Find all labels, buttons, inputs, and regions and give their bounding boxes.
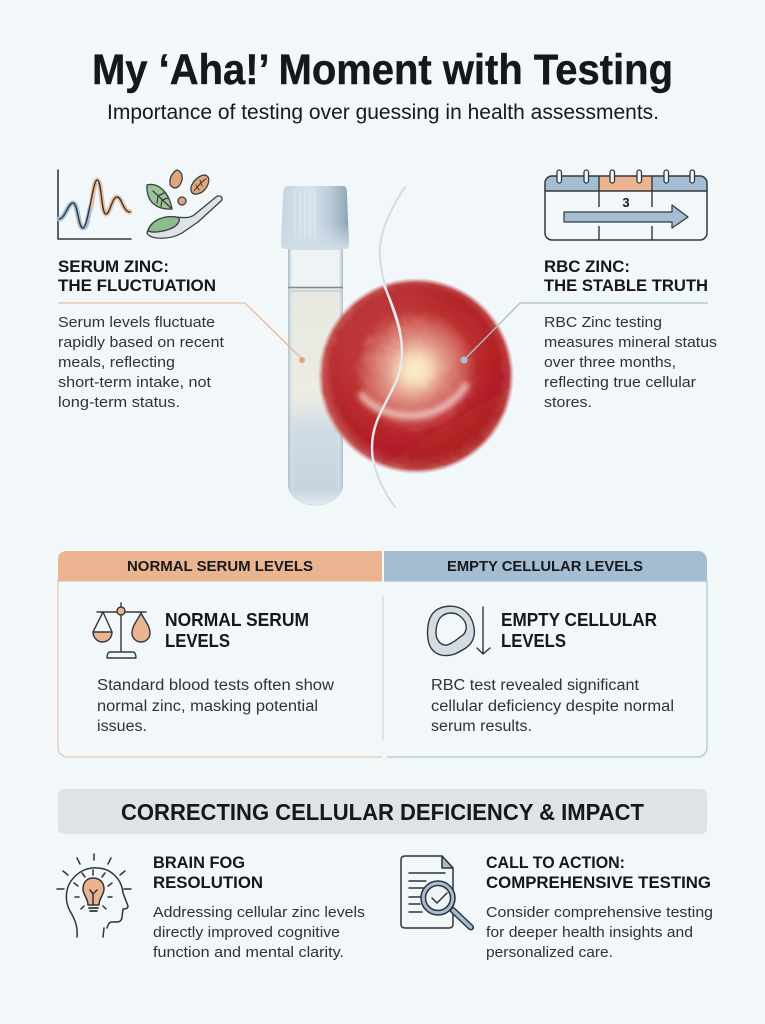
- icon: document with magnifier: [401, 856, 473, 930]
- header: normal serum levels: NORMAL SERUM LEVELS: [127, 559, 313, 575]
- panel: normal serum levels: [58, 551, 382, 757]
- text: brain fog description: Addressing cellular zinc levels: [153, 904, 365, 921]
- text: serum zinc description: short-term intake, not: [58, 374, 212, 391]
- heading: normal serum levels: NORMAL SERUM: [165, 610, 309, 630]
- heading: empty cellular levels: [501, 610, 657, 651]
- text: call to action description: Consider comprehensive testing: [486, 904, 713, 921]
- icon: fluctuation chart: [58, 170, 131, 239]
- text: normal serum description: issues.: [97, 718, 147, 735]
- text: empty cellular description: RBC test revealed significant: [431, 677, 640, 694]
- banner: correcting cellular deficiency: CORRECTING CELLULAR DEFICIENCY & IMPACT: [121, 799, 644, 825]
- heading: empty cellular levels: EMPTY CELLULAR: [501, 610, 657, 630]
- illustration: test tube: [281, 186, 349, 505]
- heading: brain fog resolution: [153, 854, 263, 892]
- text: rbc zinc description: over three months,: [544, 354, 676, 371]
- heading: call to action: COMPREHENSIVE TESTING: [486, 874, 711, 892]
- heading: serum zinc: THE FLUCTUATION: [58, 276, 216, 295]
- heading: rbc zinc: THE STABLE TRUTH: [544, 276, 708, 295]
- heading: normal serum levels: LEVELS: [165, 631, 230, 651]
- text: empty cellular description: [431, 677, 674, 735]
- icon: balance scale: [93, 603, 150, 658]
- illustration: red blood cell: [318, 278, 514, 474]
- header: normal serum levels: [58, 551, 382, 581]
- text: empty cellular description: cellular deficiency despite normal: [431, 698, 674, 715]
- callout: rbc leader line: [460, 303, 708, 364]
- heading: serum zinc: [58, 257, 216, 295]
- heading: rbc zinc: [544, 257, 708, 295]
- panel: rbc zinc: [544, 170, 717, 411]
- text: normal serum description: normal zinc, masking potential: [97, 698, 318, 715]
- text: rbc zinc description: stores.: [544, 394, 592, 411]
- text: rbc zinc description: [544, 314, 717, 411]
- subtitle: Importance of testing over guessing in health assessments.: [107, 101, 659, 124]
- text: brain fog description: directly improved cognitive: [153, 924, 340, 941]
- text: serum zinc description: meals, reflecting: [58, 354, 175, 371]
- text: brain fog description: function and mental clarity.: [153, 944, 344, 961]
- heading: call to action: CALL TO ACTION:: [486, 854, 625, 872]
- callout: serum leader line: [58, 303, 305, 363]
- heading: empty cellular levels: LEVELS: [501, 631, 566, 651]
- text: call to action description: for deeper health insights and: [486, 924, 693, 941]
- text: serum zinc description: Serum levels fluctuate: [58, 314, 215, 331]
- icon: empty cell with down arrow: [428, 606, 490, 656]
- panel: empty cellular levels: [383, 551, 707, 757]
- text: empty cellular description: serum results.: [431, 718, 532, 735]
- heading: brain fog resolution: RESOLUTION: [153, 874, 263, 892]
- text: call to action description: personalized care.: [486, 944, 613, 961]
- banner: correcting cellular deficiency: [58, 789, 707, 834]
- text: brain fog description: [153, 904, 365, 961]
- header: empty cellular levels: EMPTY CELLULAR LEVELS: [447, 559, 643, 575]
- text: normal serum description: [97, 677, 335, 735]
- text: rbc zinc description: RBC Zinc testing: [544, 314, 662, 331]
- icon: leaf, nuts and spoon: [147, 170, 222, 238]
- icon: three month calendar: 3: [622, 195, 630, 210]
- text: normal serum description: Standard blood tests often show: [97, 677, 335, 694]
- panel: brain fog resolution: [57, 854, 365, 961]
- panel: serum zinc: [58, 170, 225, 411]
- text: rbc zinc description: reflecting true cellular: [544, 374, 696, 391]
- heading: rbc zinc: RBC ZINC:: [544, 257, 630, 276]
- panel: call to action: [401, 854, 713, 961]
- title: My ‘Aha!’ Moment with Testing: [92, 47, 673, 94]
- heading: brain fog resolution: BRAIN FOG: [153, 854, 245, 872]
- wavy separator line: [372, 187, 405, 507]
- heading: call to action: [486, 854, 711, 892]
- text: serum zinc description: rapidly based on recent: [58, 334, 225, 351]
- text: serum zinc description: long-term status.: [58, 394, 180, 411]
- heading: normal serum levels: [165, 610, 309, 651]
- text: rbc zinc description: measures mineral status: [544, 334, 717, 351]
- header: empty cellular levels: [384, 551, 707, 581]
- heading: serum zinc: SERUM ZINC:: [58, 257, 169, 276]
- icon: three month calendar: [545, 170, 707, 240]
- text: serum zinc description: [58, 314, 225, 411]
- text: call to action description: [486, 904, 713, 961]
- icon: head with lightbulb: [57, 854, 131, 937]
